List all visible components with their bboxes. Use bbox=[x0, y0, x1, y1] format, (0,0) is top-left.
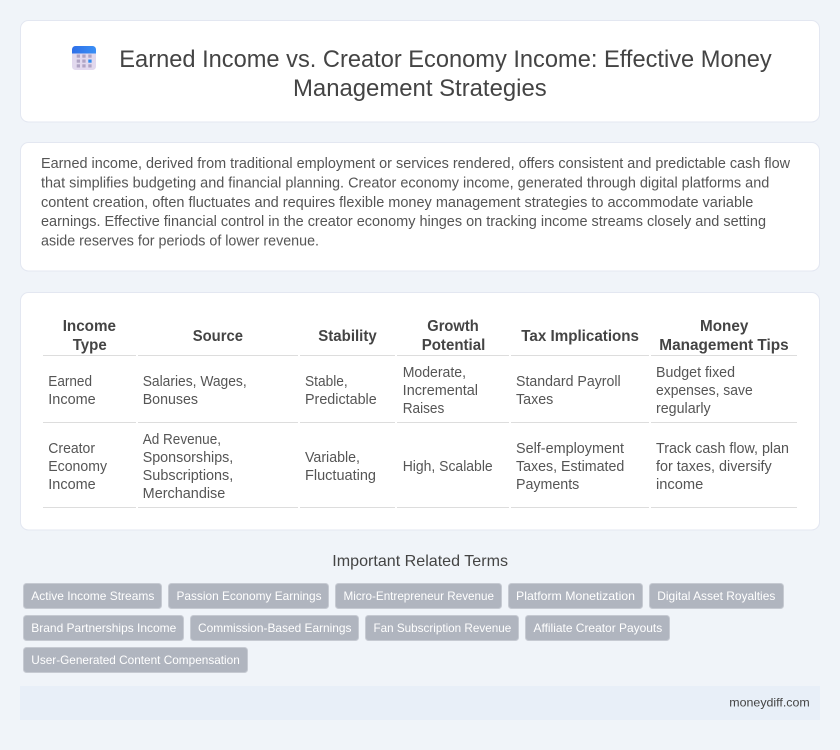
table row: creator economy income: Economy bbox=[48, 459, 108, 475]
table row: creator economy income: Fluctuating bbox=[305, 468, 376, 484]
table header row: Tax Implications bbox=[521, 328, 639, 345]
tag list: related terms: Passion Economy Earnings bbox=[176, 589, 322, 603]
table header row: Income bbox=[63, 318, 116, 335]
title: Earned Income vs. Creator Economy Income: Effective Money bbox=[119, 46, 772, 73]
table header row: Stability bbox=[318, 328, 377, 345]
text block: introduction paragraph: aside reserves for periods of lower revenue. bbox=[41, 234, 319, 250]
tag list: related terms: Active Income Streams bbox=[31, 589, 154, 603]
table row: creator economy income: Ad Revenue, bbox=[143, 432, 221, 448]
table row: earned income: Bonuses bbox=[143, 392, 198, 408]
text block: introduction paragraph: Earned income, derived from traditional employment or services rendered, offers consistent and predictable cash flow bbox=[41, 156, 791, 172]
table header row: Source bbox=[193, 328, 243, 345]
footer source text: moneydiff.com bbox=[729, 696, 810, 710]
table row: earned income bbox=[48, 365, 753, 417]
table row: earned income: Raises bbox=[403, 401, 444, 417]
tag list: related terms: Micro-Entrepreneur Revenue bbox=[344, 589, 494, 603]
table row: creator economy income: Payments bbox=[516, 477, 579, 493]
table row: earned income: Salaries, Wages, bbox=[143, 374, 247, 390]
table header row: Potential bbox=[422, 337, 485, 354]
table row: earned income: expenses, save bbox=[656, 383, 753, 399]
table row: creator economy income: Sponsorships, bbox=[143, 450, 233, 466]
table row: creator economy income: Track cash flow, plan bbox=[656, 441, 789, 457]
table row: creator economy income: Subscriptions, bbox=[143, 468, 233, 484]
table row: earned income: Moderate, bbox=[403, 365, 466, 381]
table header row bbox=[63, 318, 789, 354]
text block: introduction paragraph: earnings. Effective financial control in the creator economy hinges on tracking income streams closely and setting bbox=[41, 214, 766, 230]
table row: creator economy income: Creator bbox=[48, 441, 95, 457]
text block: introduction paragraph: that simplifies budgeting and financial planning. Creator economy income, generated through digital platforms and bbox=[41, 175, 769, 191]
tag list: related terms bbox=[24, 584, 784, 672]
table header row: Type bbox=[73, 337, 107, 354]
text block: introduction paragraph: content creation, often fluctuates and requires flexible money management strategies to accommodate variable bbox=[41, 195, 753, 211]
table row: creator economy income: Taxes, Estimated bbox=[516, 459, 624, 475]
table row: earned income: Taxes bbox=[516, 392, 553, 408]
table header row: Money bbox=[700, 318, 748, 335]
table row: creator economy income: Income bbox=[48, 477, 96, 493]
tag list: related terms: Fan Subscription Revenue bbox=[374, 621, 512, 635]
table row: earned income: Income bbox=[48, 392, 96, 408]
tag list: related terms: User-Generated Content Compensation bbox=[31, 653, 240, 667]
panel: comparison table bbox=[20, 292, 820, 530]
table header row: Growth bbox=[427, 318, 479, 335]
table row: creator economy income: High, Scalable bbox=[403, 459, 493, 475]
table row: earned income: Standard Payroll bbox=[516, 374, 621, 390]
table row: creator economy income: Self-employment bbox=[516, 441, 624, 457]
table row: creator economy income: Merchandise bbox=[143, 486, 225, 502]
icon: calendar bbox=[72, 46, 96, 70]
footer bar bbox=[20, 686, 820, 720]
tag list: related terms: Platform Monetization bbox=[516, 589, 635, 603]
title bbox=[119, 46, 772, 102]
tag list: related terms: Commission-Based Earnings bbox=[198, 621, 352, 635]
text block: introduction paragraph bbox=[41, 156, 791, 250]
panel: title header bbox=[20, 20, 820, 122]
table row: earned income: Incremental bbox=[403, 383, 478, 399]
tag list: related terms: Affiliate Creator Payouts bbox=[534, 621, 662, 635]
tag list: related terms: Brand Partnerships Income bbox=[31, 621, 177, 635]
table row: creator economy income: Variable, bbox=[305, 450, 360, 466]
table row: creator economy income: income bbox=[656, 477, 703, 493]
table row: creator economy income: for taxes, diversify bbox=[656, 459, 772, 475]
title: Management Strategies bbox=[293, 75, 547, 102]
table row: creator economy income bbox=[48, 432, 789, 502]
table row: earned income: regularly bbox=[656, 401, 711, 417]
heading: important related terms: Important Related Terms bbox=[332, 553, 508, 570]
tag list: related terms: Digital Asset Royalties bbox=[657, 589, 775, 603]
table header row: Management Tips bbox=[659, 337, 789, 354]
table row: earned income: Earned bbox=[48, 374, 92, 390]
table row: earned income: Budget fixed bbox=[656, 365, 735, 381]
table row: earned income: Predictable bbox=[305, 392, 377, 408]
panel: introduction text bbox=[20, 142, 820, 271]
table row: earned income: Stable, bbox=[305, 374, 348, 390]
